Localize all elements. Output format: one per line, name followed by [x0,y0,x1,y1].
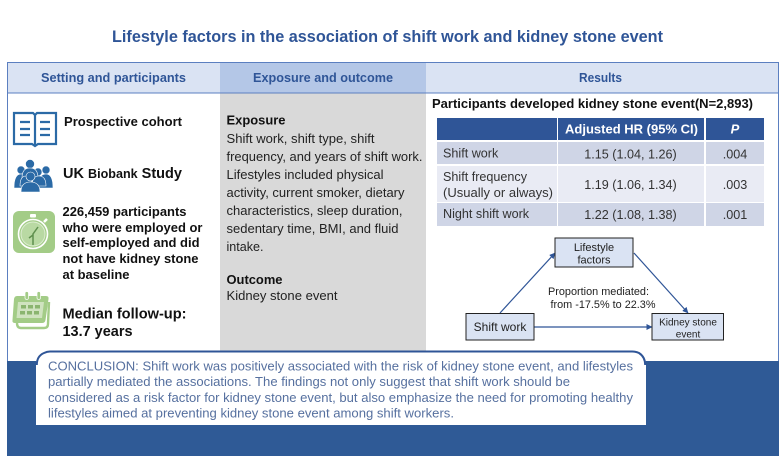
text: exposure: frequency, and years of shift work. [226,149,422,164]
table: .004 [723,148,747,162]
header: results: Results [579,71,622,85]
text: prospective cohort: Prospective cohort [64,114,183,129]
text: participants: self-employed and did [62,235,200,250]
text: exposure: Lifestyles included physical [226,167,384,182]
text: exposure: Shift work, shift type, shift [226,131,375,146]
conclusion text [48,360,634,420]
box: kidney stone event: Kidney stone [659,318,717,328]
text: participants: 226,459 participants [62,204,186,219]
table: (Usually or always) [443,186,553,200]
text: exposure: Exposure [226,112,286,128]
text: exposure: sedentary time, BMI, and fluid [226,221,398,236]
box: lifestyle factors: Lifestyle [574,242,614,254]
box: lifestyle factors: factors [577,254,611,266]
text: participants: who were employed or [62,220,202,235]
table: 1.19 (1.06, 1.34) [584,178,677,192]
text: median follow-up: Median follow-up: [62,306,186,322]
text: exposure: intake. [226,239,264,254]
table: Shift work [443,146,499,160]
table: Adjusted HR (95% CI) [565,122,698,136]
column: exposure background [220,93,426,361]
box: kidney stone event [652,314,724,340]
text: median follow-up: 13.7 years [62,323,132,340]
header: setting and participants: Setting and participants [41,71,186,85]
text: exposure [226,112,422,254]
text: exposure: characteristics, sleep duration, [226,203,402,218]
text: participants: not have kidney stone [62,251,198,266]
table: Shift frequency [443,170,528,184]
arrow: shift work to lifestyle factors [500,253,555,313]
arrow: lifestyle factors to kidney stone event [634,253,688,313]
icon: stopwatch [13,211,55,253]
conclusion text: CONCLUSION: Shift work was positively associated with the risk of kidney stone event, and lifestyles [48,360,633,374]
text: participants: at baseline [62,267,130,282]
table: 1.22 (1.08, 1.38) [584,208,677,222]
conclusion box [36,351,646,425]
text: outcome: Outcome [226,272,282,287]
results heading: Participants developed kidney stone event(N=2,893) [432,96,753,111]
table: .003 [723,178,747,192]
box: shift work [466,314,534,340]
conclusion text: partially mediated the associations. The findings not only suggest that shift work should be [48,375,570,389]
box: shift work: Shift work [474,320,527,334]
header rule [8,92,778,94]
blue band [7,361,779,456]
conclusion text: lifestyles aimed at preventing kidney stone event among shift workers. [48,406,454,420]
header: results [426,63,778,93]
title: Lifestyle factors in the association of shift work and kidney stone event [112,27,663,46]
conclusion text: considered as a risk factor for kidney stone event, but also emphasize the need for promoting healthy [48,391,634,405]
header: exposure and outcome: Exposure and outcome [253,71,393,85]
icon: calendar [12,292,49,328]
box: kidney stone event: event [676,330,700,340]
text: exposure: activity, current smoker, dietary [226,185,405,200]
text: uk biobank study: UK Biobank Study [63,165,183,182]
icon: people [14,160,53,192]
text: proportion mediated: from -17.5% to 22.3% [550,299,656,311]
text: proportion mediated: Proportion mediated: [548,286,649,298]
box: lifestyle factors [555,238,633,267]
table: .001 [723,208,747,222]
text: outcome: Kidney stone event [226,288,338,303]
icon: book [14,113,56,146]
header: setting and participants [8,63,220,93]
arrow: shift work to kidney stone event [534,326,652,328]
table: P [731,122,740,136]
text: median follow-up [62,306,186,340]
table: 1.15 (1.04, 1.26) [584,148,677,162]
text: proportion mediated [548,286,656,311]
text: participants [62,204,202,282]
text: outcome [226,272,338,303]
table: Night shift work [443,207,530,221]
header: exposure and outcome [220,63,426,93]
table [437,118,764,226]
